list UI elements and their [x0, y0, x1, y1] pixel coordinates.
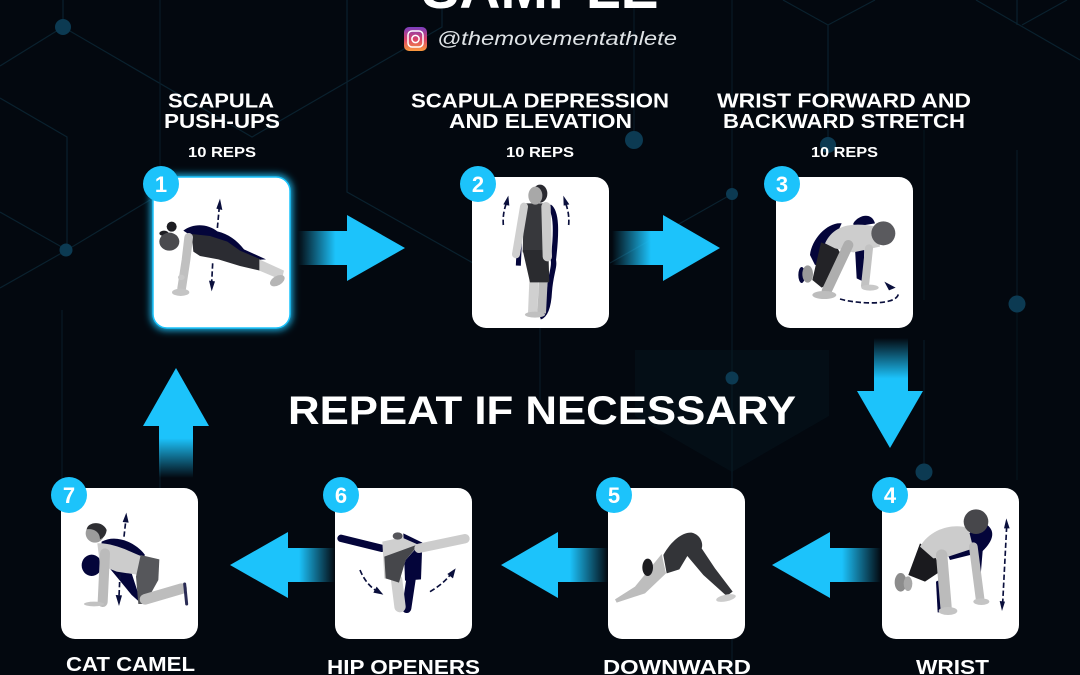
step 6: hip openers [323, 477, 480, 675]
card [335, 488, 472, 639]
badge 7: 7 [63, 483, 75, 508]
arrow 5 to 6 [501, 532, 608, 598]
icon: instagram [404, 27, 427, 51]
heading: SCAPULA DEPRESSION [411, 90, 669, 112]
badge 4: 4 [884, 483, 897, 508]
figure: hip opener [341, 532, 465, 608]
heading [164, 90, 280, 133]
badge 1: 1 [155, 172, 167, 197]
badge 4 [872, 477, 908, 513]
badge 1 [143, 166, 179, 202]
heading: BACKWARD STRETCH [723, 111, 965, 133]
heading: SCAPULA [168, 90, 274, 112]
heading: PUSH-UPS [164, 111, 280, 133]
badge 2 [460, 166, 496, 202]
figure: downward dog [615, 533, 736, 603]
card [882, 488, 1019, 639]
heading: WRIST FORWARD AND [717, 90, 971, 112]
badge 2: 2 [472, 172, 484, 197]
step 2: scapula depression and elevation [411, 90, 669, 328]
figure: kneeling wrist stretch [798, 216, 898, 303]
arrow 3 to 4 [857, 338, 923, 448]
figure: plank with wrist shift [895, 509, 1010, 615]
reps: 10 REPS [811, 144, 878, 161]
badge 3 [764, 166, 800, 202]
heading [717, 90, 971, 133]
figure: standing [503, 185, 569, 318]
badge 5: 5 [608, 483, 620, 508]
card [61, 488, 198, 639]
badge 3: 3 [776, 172, 788, 197]
badge 6: 6 [335, 483, 347, 508]
step 5: downward [596, 477, 751, 675]
badge 6 [323, 477, 359, 513]
step 7: cat camel [51, 477, 198, 675]
heading [411, 90, 669, 133]
arrow 7 to 1 [143, 368, 209, 478]
arrow 6 to 7 [230, 532, 335, 598]
card [776, 177, 913, 328]
arrow 4 to 5 [772, 532, 881, 598]
card [608, 488, 745, 639]
card [472, 177, 609, 328]
step 4: wrist [872, 477, 1019, 675]
repeat label: REPEAT IF NECESSARY [288, 389, 796, 433]
arrow 1 to 2 [298, 215, 405, 281]
badge 7 [51, 477, 87, 513]
step 3: wrist forward and backward stretch [717, 90, 971, 328]
instagram handle [404, 27, 677, 51]
card [153, 177, 290, 328]
reps: 10 REPS [506, 144, 574, 161]
card glow [151, 175, 292, 330]
reps: 10 REPS [188, 144, 256, 161]
handle text: @themovementathlete [437, 29, 677, 50]
badge 5 [596, 477, 632, 513]
heading: AND ELEVATION [449, 111, 632, 133]
arrow 2 to 3 [612, 215, 720, 281]
step 1: scapula push-ups [143, 90, 292, 330]
figure: cat camel [82, 513, 187, 606]
figure: push-up [159, 199, 287, 296]
